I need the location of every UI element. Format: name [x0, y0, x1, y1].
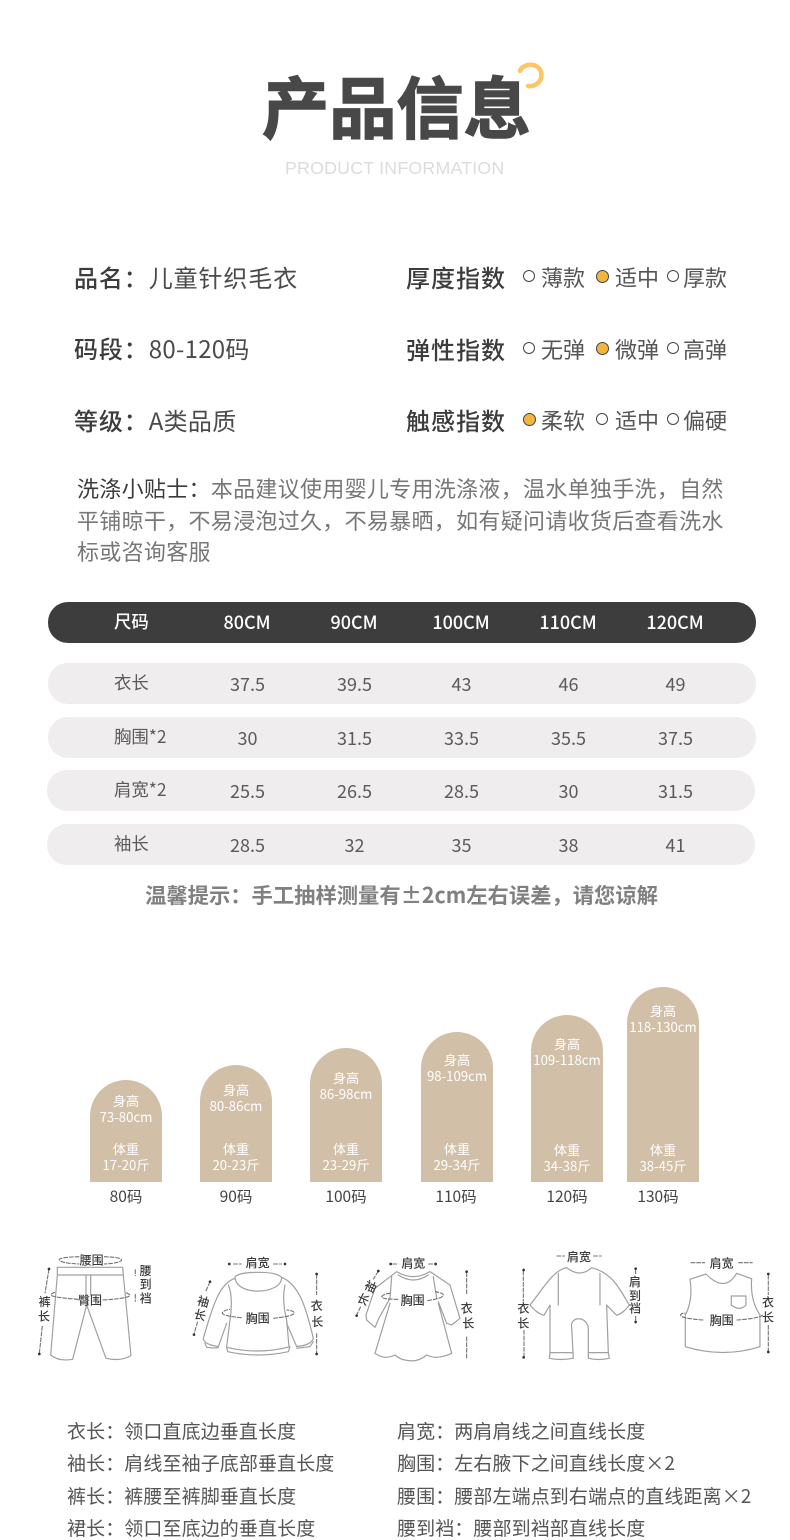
subtitle: PRODUCT INFORMATION — [285, 158, 504, 178]
row: chest: 胸围*2 — [114, 724, 167, 749]
diagram: sweatshirt: 肩宽 — [246, 1254, 270, 1271]
washing tips: 平铺晾干，不易浸泡过久，不易暴晒，如有疑问请收货后查看洗水 — [77, 504, 724, 536]
row: chest: 33.5 — [444, 725, 479, 751]
size labels — [110, 1185, 679, 1207]
elasticity index: 无弹 — [541, 333, 585, 365]
bar: 90 — [200, 1065, 272, 1182]
diagram: sweatshirt: 衣 — [311, 1297, 323, 1314]
bar: 120 — [531, 1015, 603, 1182]
measurement definitions: left column — [67, 1417, 334, 1540]
diagram: romper: 长 — [517, 1314, 529, 1331]
row: shoulder: 28.5 — [444, 778, 479, 804]
thickness index: 厚款 — [683, 261, 727, 293]
grade: 等级：A类品质 — [74, 402, 236, 437]
row: sleeve: 38 — [558, 832, 578, 858]
bar: 110: 身高 — [444, 1050, 470, 1069]
measurement note: 温馨提示：手工抽样测量有±2cm左右误差，请您谅解 — [145, 879, 658, 910]
bar: 100: 体重 — [333, 1139, 359, 1158]
size labels: 90码 — [220, 1185, 252, 1207]
size table — [47, 602, 756, 865]
row: chest: 37.5 — [658, 725, 693, 751]
row: shoulder: 31.5 — [658, 778, 693, 804]
diagram: romper — [517, 1248, 641, 1359]
bar: 110: 29-34斤 — [433, 1155, 481, 1174]
bar: 120: 身高 — [554, 1034, 580, 1053]
bar: 80: 体重 — [113, 1139, 139, 1158]
measurement definitions: left column: 裤长：裤腰至裤脚垂直长度 — [67, 1482, 296, 1509]
bar: 130: 38-45斤 — [639, 1156, 687, 1175]
table header: 尺码 — [114, 609, 149, 634]
diagram: vest — [681, 1255, 774, 1353]
diagram: vest: 衣 — [762, 1294, 774, 1311]
elasticity index — [406, 331, 727, 366]
bar: 110: 98-109cm — [427, 1066, 487, 1085]
icon: orange ring — [518, 62, 544, 88]
row: chest — [48, 717, 756, 758]
bar: 130: 身高 — [650, 1001, 676, 1020]
diagram: vest: 肩宽 — [710, 1255, 734, 1272]
thickness index: 厚度指数 — [406, 259, 506, 294]
diagram: romper: 到 — [629, 1287, 641, 1304]
row: sleeve: 41 — [666, 832, 685, 858]
table header: 110CM — [539, 609, 597, 635]
bar: 80: 17-20斤 — [102, 1155, 150, 1174]
diagram: vest: 长 — [762, 1309, 774, 1326]
row: chest: 35.5 — [551, 725, 586, 751]
diagram: pants: 裆 — [140, 1290, 152, 1307]
bar: 90: 20-23斤 — [212, 1155, 260, 1174]
diagram: pants: 臀围 — [78, 1291, 102, 1308]
size labels: 130码 — [637, 1185, 679, 1207]
table header: 90CM — [330, 609, 378, 635]
diagram: sweatshirt — [192, 1254, 323, 1355]
bar: 80 — [90, 1080, 162, 1182]
table header: 100CM — [432, 609, 490, 635]
size labels: 110码 — [435, 1185, 477, 1207]
row: sleeve: 32 — [344, 832, 364, 858]
diagram: pants: 长 — [38, 1307, 50, 1324]
bar: 100: 86-98cm — [320, 1084, 372, 1103]
diagram: vest: 胸围 — [710, 1311, 734, 1328]
row: shoulder: 26.5 — [337, 778, 372, 804]
bar: 90: 身高 — [223, 1080, 249, 1099]
bar: 90: 80-86cm — [210, 1096, 262, 1115]
bar: 120: 34-38斤 — [543, 1156, 591, 1175]
row: shoulder: 肩宽*2 — [114, 777, 167, 802]
table header: 120CM — [646, 609, 704, 635]
bar: 130 — [627, 987, 699, 1182]
row: sleeve: 35 — [452, 832, 471, 858]
elasticity index: 高弹 — [683, 333, 727, 365]
row: chest: 30 — [238, 725, 257, 751]
size bar chart — [90, 987, 699, 1207]
diagram: dress: 衣 — [461, 1300, 473, 1317]
measurement definitions: left column: 袖长：肩线至袖子底部垂直长度 — [67, 1449, 334, 1476]
measurement definitions: right column: 腰围：腰部左端点到右端点的直线距离×2 — [397, 1482, 751, 1509]
diagram: dress: 袖 — [362, 1276, 380, 1297]
bar: 110: 体重 — [444, 1139, 470, 1158]
row: sleeve: 袖长 — [114, 831, 149, 856]
row: body length — [48, 663, 756, 704]
touch index: 偏硬 — [683, 404, 727, 436]
row: shoulder — [47, 770, 755, 811]
size labels: 100码 — [325, 1185, 367, 1207]
title — [262, 56, 544, 153]
product name: 品名：儿童针织毛衣 — [74, 259, 298, 294]
bar: 100 — [310, 1048, 382, 1182]
bar: 120: 体重 — [554, 1140, 580, 1159]
row: sleeve — [47, 824, 755, 865]
diagram: pants: 到 — [140, 1275, 152, 1292]
bar: 100: 23-29斤 — [322, 1155, 370, 1174]
bar: 80: 身高 — [113, 1091, 139, 1110]
washing tips: 标或咨询客服 — [77, 535, 211, 567]
row: body length: 43 — [452, 671, 471, 697]
diagram: dress — [354, 1255, 474, 1361]
bar: 130: 体重 — [650, 1140, 676, 1159]
measurement definitions: right column — [397, 1417, 751, 1540]
thickness index: 适中 — [615, 261, 659, 293]
washing tips: 洗涤小贴士：本品建议使用婴儿专用洗涤液，温水单独手洗，自然 — [77, 472, 724, 504]
size range: 码段：80-120码 — [74, 330, 250, 365]
diagram: dress: 肩宽 — [401, 1255, 425, 1272]
diagram: pants: 腰围 — [80, 1251, 104, 1268]
diagram: romper: 衣 — [517, 1300, 529, 1317]
diagram: dress: 胸围 — [401, 1291, 425, 1308]
diagram: dress: 长 — [462, 1315, 474, 1332]
washing tips — [77, 472, 724, 567]
bar: 120: 109-118cm — [533, 1050, 601, 1069]
row: body length: 37.5 — [230, 671, 265, 697]
diagram: sweatshirt: 胸围 — [246, 1310, 270, 1327]
thickness index: 薄款 — [541, 261, 585, 293]
touch index: 适中 — [615, 404, 659, 436]
bar: 100: 身高 — [333, 1068, 359, 1087]
bar: 110 — [421, 1032, 493, 1182]
touch index: 柔软 — [541, 404, 585, 436]
size labels: 80码 — [110, 1185, 142, 1207]
row: shoulder: 30 — [558, 778, 578, 804]
row: body length: 46 — [558, 671, 578, 697]
touch index — [406, 402, 727, 437]
measurement definitions: right column: 肩宽：两肩肩线之间直线长度 — [397, 1417, 645, 1444]
row: sleeve: 28.5 — [230, 832, 265, 858]
diagram: sweatshirt: 长 — [192, 1305, 208, 1325]
thickness index — [406, 259, 727, 294]
diagram: sweatshirt: 袖 — [195, 1292, 211, 1311]
elasticity index: 弹性指数 — [406, 331, 506, 366]
row: body length: 39.5 — [337, 671, 372, 697]
size labels: 120码 — [546, 1185, 588, 1207]
diagram: romper: 裆 — [629, 1300, 641, 1317]
measurement definitions: right column: 胸围：左右腋下之间直线长度×2 — [397, 1449, 675, 1476]
elasticity index: 微弹 — [615, 333, 659, 365]
diagram: romper: 肩宽 — [567, 1248, 591, 1265]
bar: 80: 73-80cm — [100, 1107, 152, 1126]
diagram: pants: 裤 — [39, 1293, 51, 1310]
garment measurement diagrams — [38, 1248, 774, 1362]
diagram: romper: 肩 — [629, 1273, 641, 1290]
diagram: sweatshirt: 长 — [311, 1313, 323, 1330]
diagram: dress: 长 — [354, 1289, 372, 1309]
row: body length: 49 — [666, 671, 685, 697]
bar: 90: 体重 — [223, 1139, 249, 1158]
title text: 产品信息 — [262, 56, 531, 153]
table header — [48, 602, 756, 643]
diagram: pants — [38, 1251, 152, 1360]
measurement definitions: left column: 衣长：领口直底边垂直长度 — [67, 1417, 296, 1444]
table header: 80CM — [223, 609, 271, 635]
row: shoulder: 25.5 — [230, 778, 265, 804]
diagram: pants: 腰 — [140, 1262, 152, 1279]
row: chest: 31.5 — [337, 725, 372, 751]
bar: 130: 118-130cm — [629, 1017, 697, 1036]
row: body length: 衣长 — [114, 670, 149, 695]
touch index: 触感指数 — [406, 402, 506, 437]
